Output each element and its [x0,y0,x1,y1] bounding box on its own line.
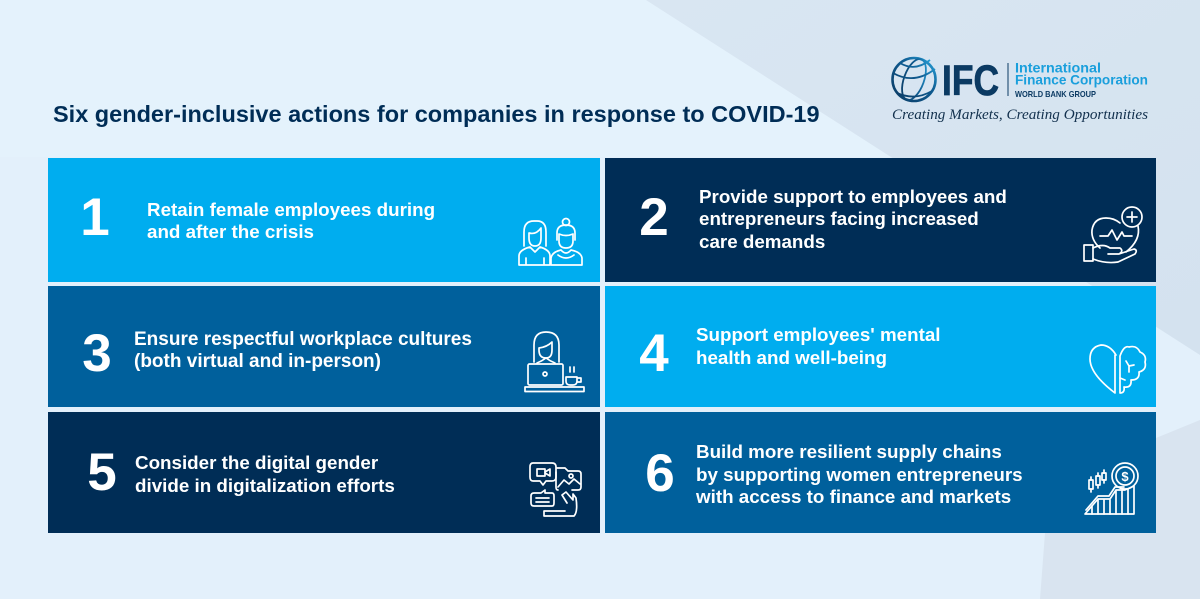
icon: woman at laptop [525,332,584,392]
text 5: divide in digitalization efforts [135,475,395,496]
number 1: 1 [80,188,110,247]
number 6: 6 [645,444,675,503]
text 2: entrepreneurs facing increased [699,208,979,229]
IFC logo: Finance Corporation [1015,72,1148,88]
text 3: Ensure respectful workplace cultures [134,329,472,350]
panel 3 [48,286,600,407]
panel 1 [48,158,600,282]
text 2: Provide support to employees and [699,186,1007,207]
icon: globe [892,56,936,103]
icon: hand holding heart [1084,207,1142,263]
icon: finance growth chart: $ [1121,469,1129,484]
panel 5 [48,412,600,533]
icon: finance growth chart [1085,463,1138,514]
logo letters IFC: IFC [942,57,999,105]
text 6: Build more resilient supply chains [696,441,1002,462]
number 4: 4 [639,324,669,383]
logo name: International [1015,60,1101,76]
text 6: by supporting women entrepreneurs [696,464,1023,485]
number 5: 5 [87,443,117,502]
panel 6 [605,412,1156,533]
text 6: with access to finance and markets [695,486,1011,507]
text 5: Consider the digital gender [135,452,379,473]
icon: social media on phone [530,463,581,516]
number 3: 3 [82,324,112,383]
IFC logo [892,56,1148,123]
text 1: and after the crisis [147,221,314,242]
text 2: care demands [699,231,825,252]
panel 2 [605,158,1156,282]
logo tagline: Creating Markets, Creating Opportunities [892,107,1148,123]
text 1: Retain female employees during [147,199,435,220]
panel 4 [605,286,1156,407]
text 4: health and well-being [696,347,887,368]
text 3: (both virtual and in-person) [134,351,381,372]
text 4: Support employees' mental [696,324,941,345]
number 2: 2 [639,188,669,247]
icon: heart and brain [1090,345,1145,393]
icon: two women [519,218,582,265]
IFC logo: WORLD BANK GROUP [1015,89,1096,99]
title: Six gender-inclusive actions for companies in response to COVID-19 [53,101,820,127]
